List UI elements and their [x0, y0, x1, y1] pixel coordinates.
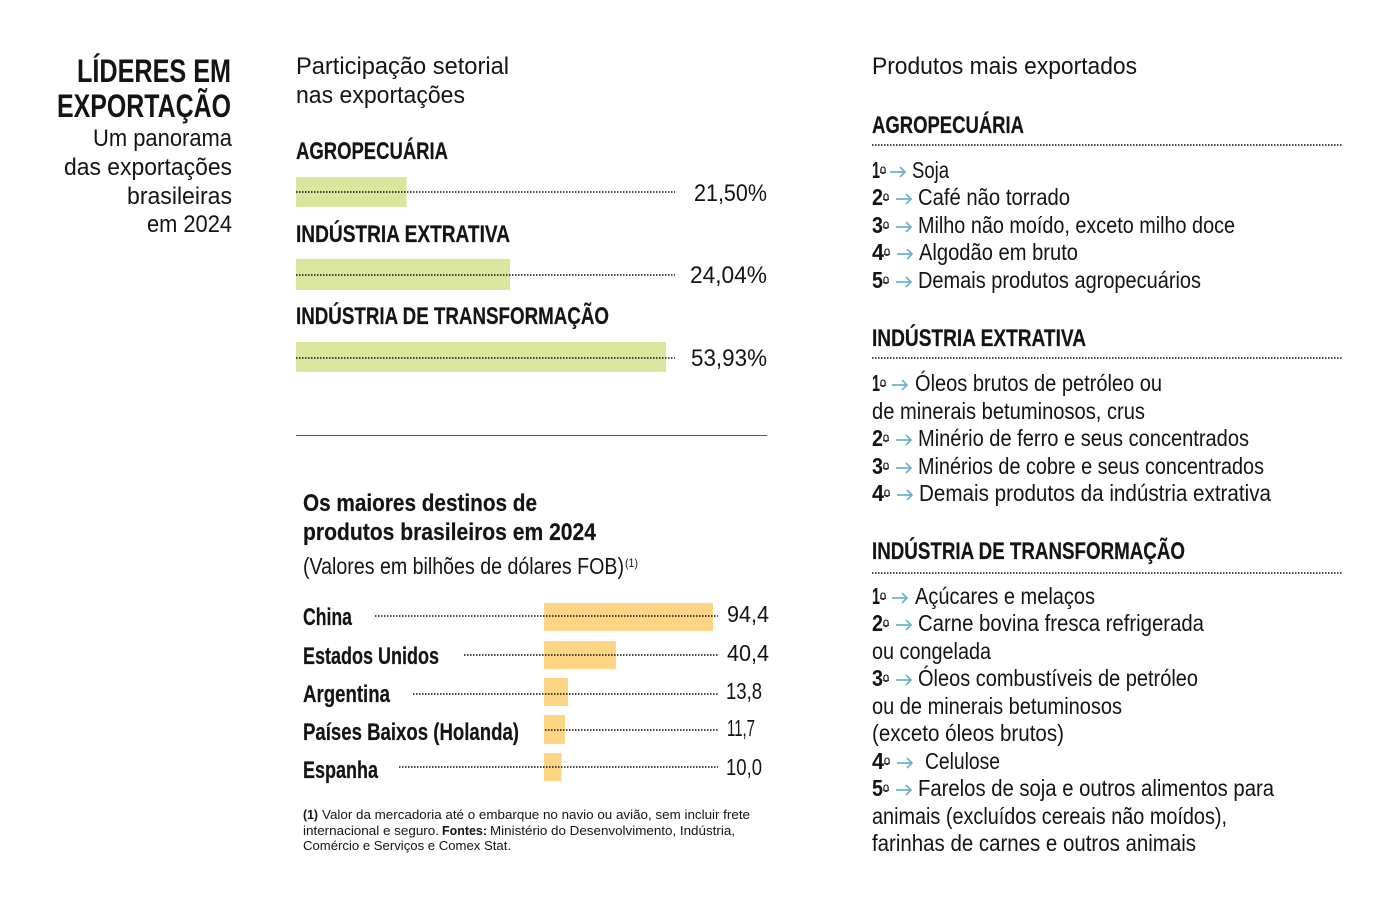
sector share heading	[296, 53, 509, 109]
section: indústria extrativa	[872, 324, 1343, 508]
item: Celulose: º	[884, 755, 890, 776]
sector bar: indústria extrativa: INDÚSTRIA EXTRATIVA	[296, 220, 510, 248]
item: Café: Café não torrado	[918, 184, 1070, 210]
item: Farelos de soja	[872, 775, 1274, 856]
item: Demais agropecuários: 5	[872, 267, 883, 293]
item: Celulose: Celulose	[925, 748, 1000, 774]
title block	[57, 53, 233, 238]
section: agropecuária	[872, 111, 1343, 295]
destinations heading: Os maiores destinos de	[303, 490, 537, 517]
item: Farelos de soja: Farelos de soja e outros alimentos para	[918, 775, 1274, 801]
item: Açúcares: º	[880, 590, 886, 611]
item: Óleos combustíveis	[872, 665, 1198, 746]
main title	[57, 53, 231, 124]
bar chart: destinations	[303, 601, 769, 784]
item: Algodão: Algodão em bruto	[919, 239, 1078, 265]
footnote: (1)	[303, 808, 318, 822]
section: indústria de transformação	[872, 537, 1343, 856]
subtitle: das exportações	[64, 154, 232, 181]
item: Café: º	[883, 191, 889, 212]
sector bar: indústria de transformação: 53,93%	[691, 345, 767, 372]
sector bar: indústria extrativa	[296, 220, 767, 290]
destinations heading	[303, 490, 638, 579]
item: Soja: º	[880, 164, 886, 185]
item: Carne bovina	[872, 610, 1204, 664]
sector share heading: Participação setorial	[296, 53, 509, 80]
sector bar: agropecuária: AGROPECUÁRIA	[296, 137, 448, 165]
footnote: Fontes:	[442, 824, 487, 838]
sector bar: indústria de transformação	[296, 302, 767, 372]
item: Açúcares	[872, 583, 1095, 611]
footnote: Comércio e Serviços e Comex Stat.	[303, 839, 511, 853]
main title: EXPORTAÇÃO	[57, 88, 231, 124]
row: Estados Unidos	[303, 640, 769, 670]
item: Algodão	[872, 239, 1078, 267]
item: Carne bovina: º	[883, 617, 889, 638]
footnote: internacional e seguro.	[303, 824, 439, 838]
section heading: agropecuária: AGROPECUÁRIA	[872, 111, 1024, 139]
row: Estados Unidos: Estados Unidos	[303, 643, 439, 670]
item: Óleos combustíveis: (exceto óleos brutos)	[872, 720, 1064, 746]
item: Óleos combustíveis: Óleos combustíveis de petróleo	[918, 665, 1198, 691]
item: Milho: º	[883, 219, 889, 240]
panel: top exported products	[872, 53, 1343, 856]
row: Argentina: 13,8	[726, 678, 762, 704]
section heading: indústria de transformação: INDÚSTRIA DE TRANSFORMAÇÃO	[872, 537, 1185, 565]
item: Demais agropecuários: º	[883, 274, 889, 295]
item: Farelos de soja: º	[883, 782, 889, 803]
item: Demais extrativa: 4	[872, 480, 884, 506]
item: Algodão: º	[884, 246, 890, 267]
item: Algodão: 4	[872, 239, 884, 265]
item: Soja	[872, 157, 949, 185]
item: Óleos combustíveis: 3	[872, 665, 883, 691]
section heading: indústria extrativa: INDÚSTRIA EXTRATIVA	[872, 324, 1086, 352]
sector bar: agropecuária: 21,50%	[694, 180, 767, 207]
sector bar: indústria extrativa: 24,04%	[690, 262, 767, 289]
item: Minérios de cobre: Minérios de cobre e seus concentrados	[918, 453, 1264, 479]
subtitle	[64, 125, 233, 238]
item: Óleos combustíveis: ou de minerais betuminosos	[872, 693, 1122, 719]
item: Óleos brutos: 1	[872, 370, 880, 396]
item: Óleos brutos	[872, 370, 1162, 424]
destinations heading: (1)	[625, 556, 638, 570]
sector bar: indústria de transformação: INDÚSTRIA DE TRANSFORMAÇÃO	[296, 302, 609, 330]
item: Carne bovina: ou congelada	[872, 638, 991, 664]
item: Óleos brutos: º	[880, 377, 886, 398]
item: Minério de ferro: 2	[872, 425, 883, 451]
row: China: China	[303, 604, 352, 631]
item: Soja: 1	[872, 157, 880, 183]
item: Minérios de cobre: 3	[872, 453, 883, 479]
item: Óleos brutos: Óleos brutos de petróleo ou	[915, 370, 1162, 396]
item: Óleos brutos: de minerais betuminosos, crus	[872, 398, 1145, 424]
item: Farelos de soja: 5	[872, 775, 883, 801]
item: Soja: Soja	[912, 157, 949, 183]
destinations heading: (Valores em bilhões de dólares FOB)	[303, 553, 624, 579]
row: Países Baixos: 11,7	[727, 715, 755, 741]
row: Argentina	[303, 678, 762, 708]
item: Minério de ferro: º	[883, 432, 889, 453]
item: Café: 2	[872, 184, 883, 210]
subtitle: brasileiras	[127, 183, 232, 210]
main title: LÍDERES EM	[77, 53, 231, 89]
item: Açúcares: 1	[872, 583, 880, 609]
item: Demais agropecuários: Demais produtos agropecuários	[918, 267, 1201, 293]
row: Estados Unidos: 40,4	[727, 640, 769, 666]
item: Carne bovina: 2	[872, 610, 883, 636]
row: Espanha: Espanha	[303, 757, 378, 784]
item: Farelos de soja: animais (excluídos cereais não moídos),	[872, 803, 1227, 829]
item: Celulose	[872, 748, 1000, 776]
item: Minérios de cobre: º	[883, 460, 889, 481]
item: Óleos combustíveis: º	[883, 672, 889, 693]
products heading: Produtos mais exportados	[872, 53, 1137, 80]
sector bar: agropecuária	[296, 137, 767, 207]
row: Países Baixos: Países Baixos (Holanda)	[303, 719, 519, 746]
item: Minério de ferro: Minério de ferro e seus concentrados	[918, 425, 1249, 451]
subtitle: Um panorama	[93, 125, 233, 152]
item: Café	[872, 184, 1070, 212]
panel: sector share	[296, 53, 767, 372]
row: China: 94,4	[727, 601, 769, 627]
sector share heading: nas exportações	[296, 82, 465, 109]
item: Demais extrativa: Demais produtos da indústria extrativa	[919, 480, 1271, 506]
destinations heading: produtos brasileiros em 2024	[303, 519, 597, 546]
item: Açúcares: Açúcares e melaços	[915, 583, 1095, 609]
footnote	[303, 808, 750, 853]
row: Espanha	[303, 753, 762, 784]
item: Celulose: 4	[872, 748, 884, 774]
footnote: Valor da mercadoria até o embarque no navio ou avião, sem incluir frete	[322, 808, 750, 822]
item: Carne bovina: Carne bovina fresca refrigerada	[918, 610, 1204, 636]
item: Milho: Milho não moído, exceto milho doce	[918, 212, 1235, 238]
row: Argentina: Argentina	[303, 681, 391, 708]
item: Demais extrativa: º	[884, 487, 890, 508]
item: Farelos de soja: farinhas de carnes e outros animais	[872, 830, 1196, 856]
subtitle: em 2024	[147, 211, 232, 238]
footnote: Ministério do Desenvolvimento, Indústria,	[490, 824, 735, 838]
row: Países Baixos	[303, 715, 755, 746]
panel: top destinations	[303, 490, 769, 853]
row: China	[303, 601, 769, 631]
row: Espanha: 10,0	[726, 754, 762, 780]
item: Milho: 3	[872, 212, 883, 238]
